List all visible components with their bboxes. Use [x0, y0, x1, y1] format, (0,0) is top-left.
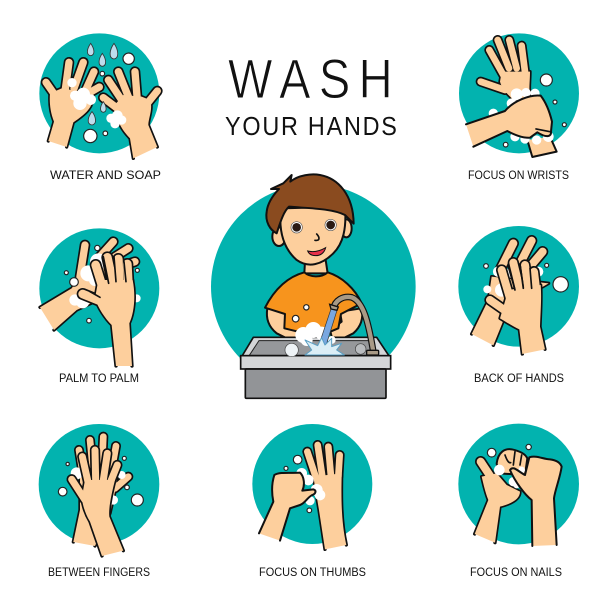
- label: focus on thumbs: FOCUS ON THUMBS: [259, 567, 366, 579]
- icon: hair: [266, 174, 354, 233]
- icon: foam: [69, 253, 141, 308]
- icon: rear hand: [472, 241, 549, 345]
- icon: lower wrist: [527, 137, 557, 157]
- icon: arms: [267, 308, 362, 343]
- icon: bubbles: [487, 444, 531, 457]
- icon: bubbles: [484, 263, 568, 292]
- icon: neck: [304, 260, 328, 273]
- icon: mouth: [308, 248, 326, 256]
- icon: foam: [295, 322, 336, 346]
- icon: splash: [305, 338, 344, 355]
- icon: front hand: [490, 263, 545, 354]
- panel: between fingers: [39, 424, 159, 556]
- icon: open hand: [307, 445, 346, 549]
- icon: bubbles: [503, 74, 566, 147]
- icon: curled fingers: [497, 449, 527, 475]
- icon: foam: [296, 468, 325, 505]
- icon: boy head: [266, 174, 354, 265]
- icon: rear hand: [40, 242, 135, 330]
- label: between fingers: BETWEEN FINGERS: [48, 567, 150, 579]
- icon: foam: [67, 78, 126, 128]
- icon: foam: [71, 467, 126, 505]
- label: focus on wrists: FOCUS ON WRISTS: [468, 170, 569, 182]
- panel: water and soap: [39, 33, 159, 158]
- icon: shirt: [265, 272, 362, 337]
- icon: bubbles: [285, 305, 366, 357]
- title: YOUR HANDS: [225, 113, 397, 141]
- central illustration: boy at sink: [211, 174, 416, 398]
- icon: foam: [489, 88, 554, 145]
- icon: gripping hand: [466, 95, 552, 147]
- icon: bubbles: [64, 245, 139, 323]
- icon: fist hand: [510, 457, 562, 546]
- title: [225, 47, 397, 141]
- icon: right hand: [103, 72, 157, 158]
- icon: front hand: [83, 257, 134, 366]
- label: focus on nails: FOCUS ON NAILS: [470, 567, 562, 579]
- icon: eyes: [291, 219, 336, 233]
- panel: focus on wrists: [459, 33, 579, 157]
- icon: bubbles: [58, 456, 143, 506]
- icon: bubbles: [284, 455, 312, 513]
- label: palm to palm: PALM TO PALM: [59, 373, 139, 385]
- icon: left hand: [46, 62, 99, 147]
- icon: foam: [494, 465, 525, 488]
- icon: water drops: [84, 43, 134, 143]
- icon: sink: [241, 337, 391, 398]
- panel: palm to palm: [39, 228, 159, 366]
- icon: foam: [483, 266, 543, 297]
- icon: fist: [259, 473, 315, 541]
- label: water and soap: WATER AND SOAP: [50, 170, 161, 182]
- icon: upright hand: [481, 40, 530, 100]
- icon: water stream: [318, 309, 337, 347]
- panel: focus on thumbs: [252, 424, 372, 549]
- icon: cupped hand: [475, 462, 520, 543]
- icon: rear hand: [73, 437, 128, 546]
- panel: back of hands: [458, 226, 579, 354]
- icon: nose: [315, 234, 319, 240]
- icon: front hand: [72, 450, 123, 556]
- title: WASH: [228, 47, 393, 110]
- icon: faucet: [330, 297, 379, 355]
- label: back of hands: BACK OF HANDS: [474, 373, 564, 385]
- panel: focus on nails: [458, 424, 579, 546]
